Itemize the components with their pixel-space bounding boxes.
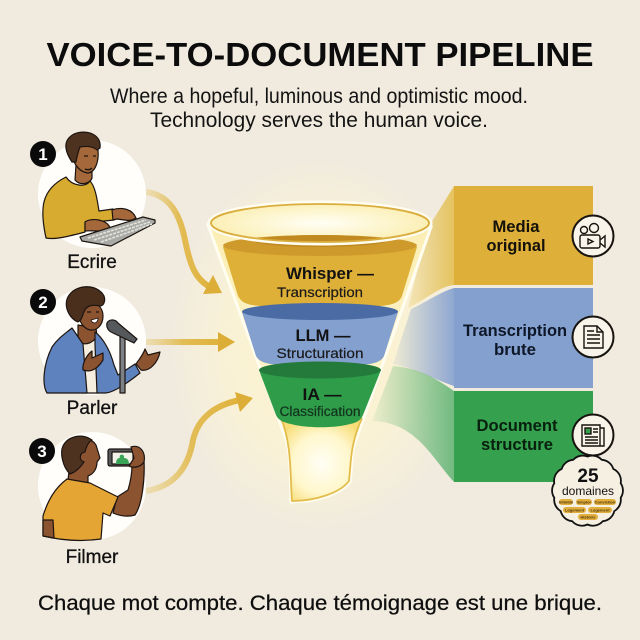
face details: [87, 311, 99, 313]
layer: llm: Structuration: [276, 345, 364, 361]
output flow: document: [372, 366, 454, 482]
panel: document structure: Document: [476, 416, 558, 435]
layer: ia: [259, 362, 381, 427]
domain tags: [559, 499, 616, 520]
panel: media original: Media: [492, 217, 540, 236]
funnel neck: [281, 418, 362, 501]
title: VOICE-TO-DOCUMENT PIPELINE: [46, 36, 594, 73]
panel: transcription brute: brute: [494, 340, 536, 359]
step 2: parler: [30, 287, 160, 419]
subtitle: [110, 85, 528, 132]
domain tags: Histoire: [581, 514, 596, 520]
step 3: filmer: [29, 432, 146, 568]
number badge: 3: [37, 442, 47, 461]
output flow: transcription: [393, 288, 454, 386]
domain tags: Intimité: [559, 500, 574, 504]
panel: document structure: structure: [481, 435, 553, 454]
keyboard: [80, 217, 155, 246]
label: Filmer: [66, 547, 119, 568]
layer: llm: LLM —: [296, 327, 351, 345]
label: Parler: [67, 398, 118, 419]
domain tags: Logement: [565, 508, 585, 512]
number badge: [30, 141, 56, 167]
badge: 25 domaines: domaines: [562, 484, 614, 498]
panel: media original: [454, 186, 593, 285]
layer: ia: IA —: [302, 386, 342, 404]
footer tagline: Chaque mot compte. Chaque témoignage est une brique.: [38, 591, 602, 615]
panel: transcription brute: [454, 288, 593, 388]
keyboard keys: [88, 220, 152, 242]
panel: document structure: [454, 391, 593, 482]
arrow: ecrire to funnel: [146, 192, 222, 294]
circle: [38, 287, 146, 395]
funnel rim fill: [210, 203, 430, 243]
icon: video camera: [572, 216, 614, 256]
person filming: [43, 436, 144, 540]
layer: whisper: Whisper —: [286, 265, 374, 283]
circle: [38, 432, 146, 540]
layer: whisper: [223, 235, 417, 308]
label: Ecrire: [67, 252, 117, 273]
face details: [84, 156, 96, 170]
funnel glow: [170, 160, 470, 530]
layer: whisper: Transcription: [277, 284, 363, 300]
arrow: parler to funnel: [146, 332, 235, 352]
output flow: media: [408, 186, 454, 308]
badge: 25 domaines: [552, 456, 623, 526]
panel: media original: original: [486, 236, 546, 255]
icon: newspaper: [572, 414, 614, 456]
person speaking: [44, 287, 160, 393]
number badge: 1: [38, 145, 48, 164]
person typing: [43, 132, 155, 246]
layer: ia: Classification: [280, 404, 360, 419]
step 1: ecrire: [30, 132, 155, 273]
layer: llm: [242, 303, 398, 367]
domain tags: Emploi: [577, 500, 591, 504]
mouth: [91, 318, 98, 323]
funnel rim: [209, 202, 431, 244]
funnel body: [208, 225, 431, 502]
subtitle: Technology serves the human voice.: [150, 109, 488, 132]
circle: [38, 140, 146, 248]
arrow: filmer to funnel: [146, 392, 253, 491]
subtitle: Where a hopeful, luminous and optimistic mood.: [110, 85, 528, 108]
domain tags: Logement: [590, 508, 610, 512]
funnel: [208, 202, 431, 502]
panel: transcription brute: Transcription: [463, 321, 567, 340]
badge: 25 domaines: 25: [577, 466, 599, 487]
number badge: 2: [38, 293, 48, 312]
microphone: [120, 337, 125, 393]
icon: document: [572, 316, 614, 358]
phone: [108, 449, 137, 466]
domain tags: Conviction: [595, 500, 616, 504]
